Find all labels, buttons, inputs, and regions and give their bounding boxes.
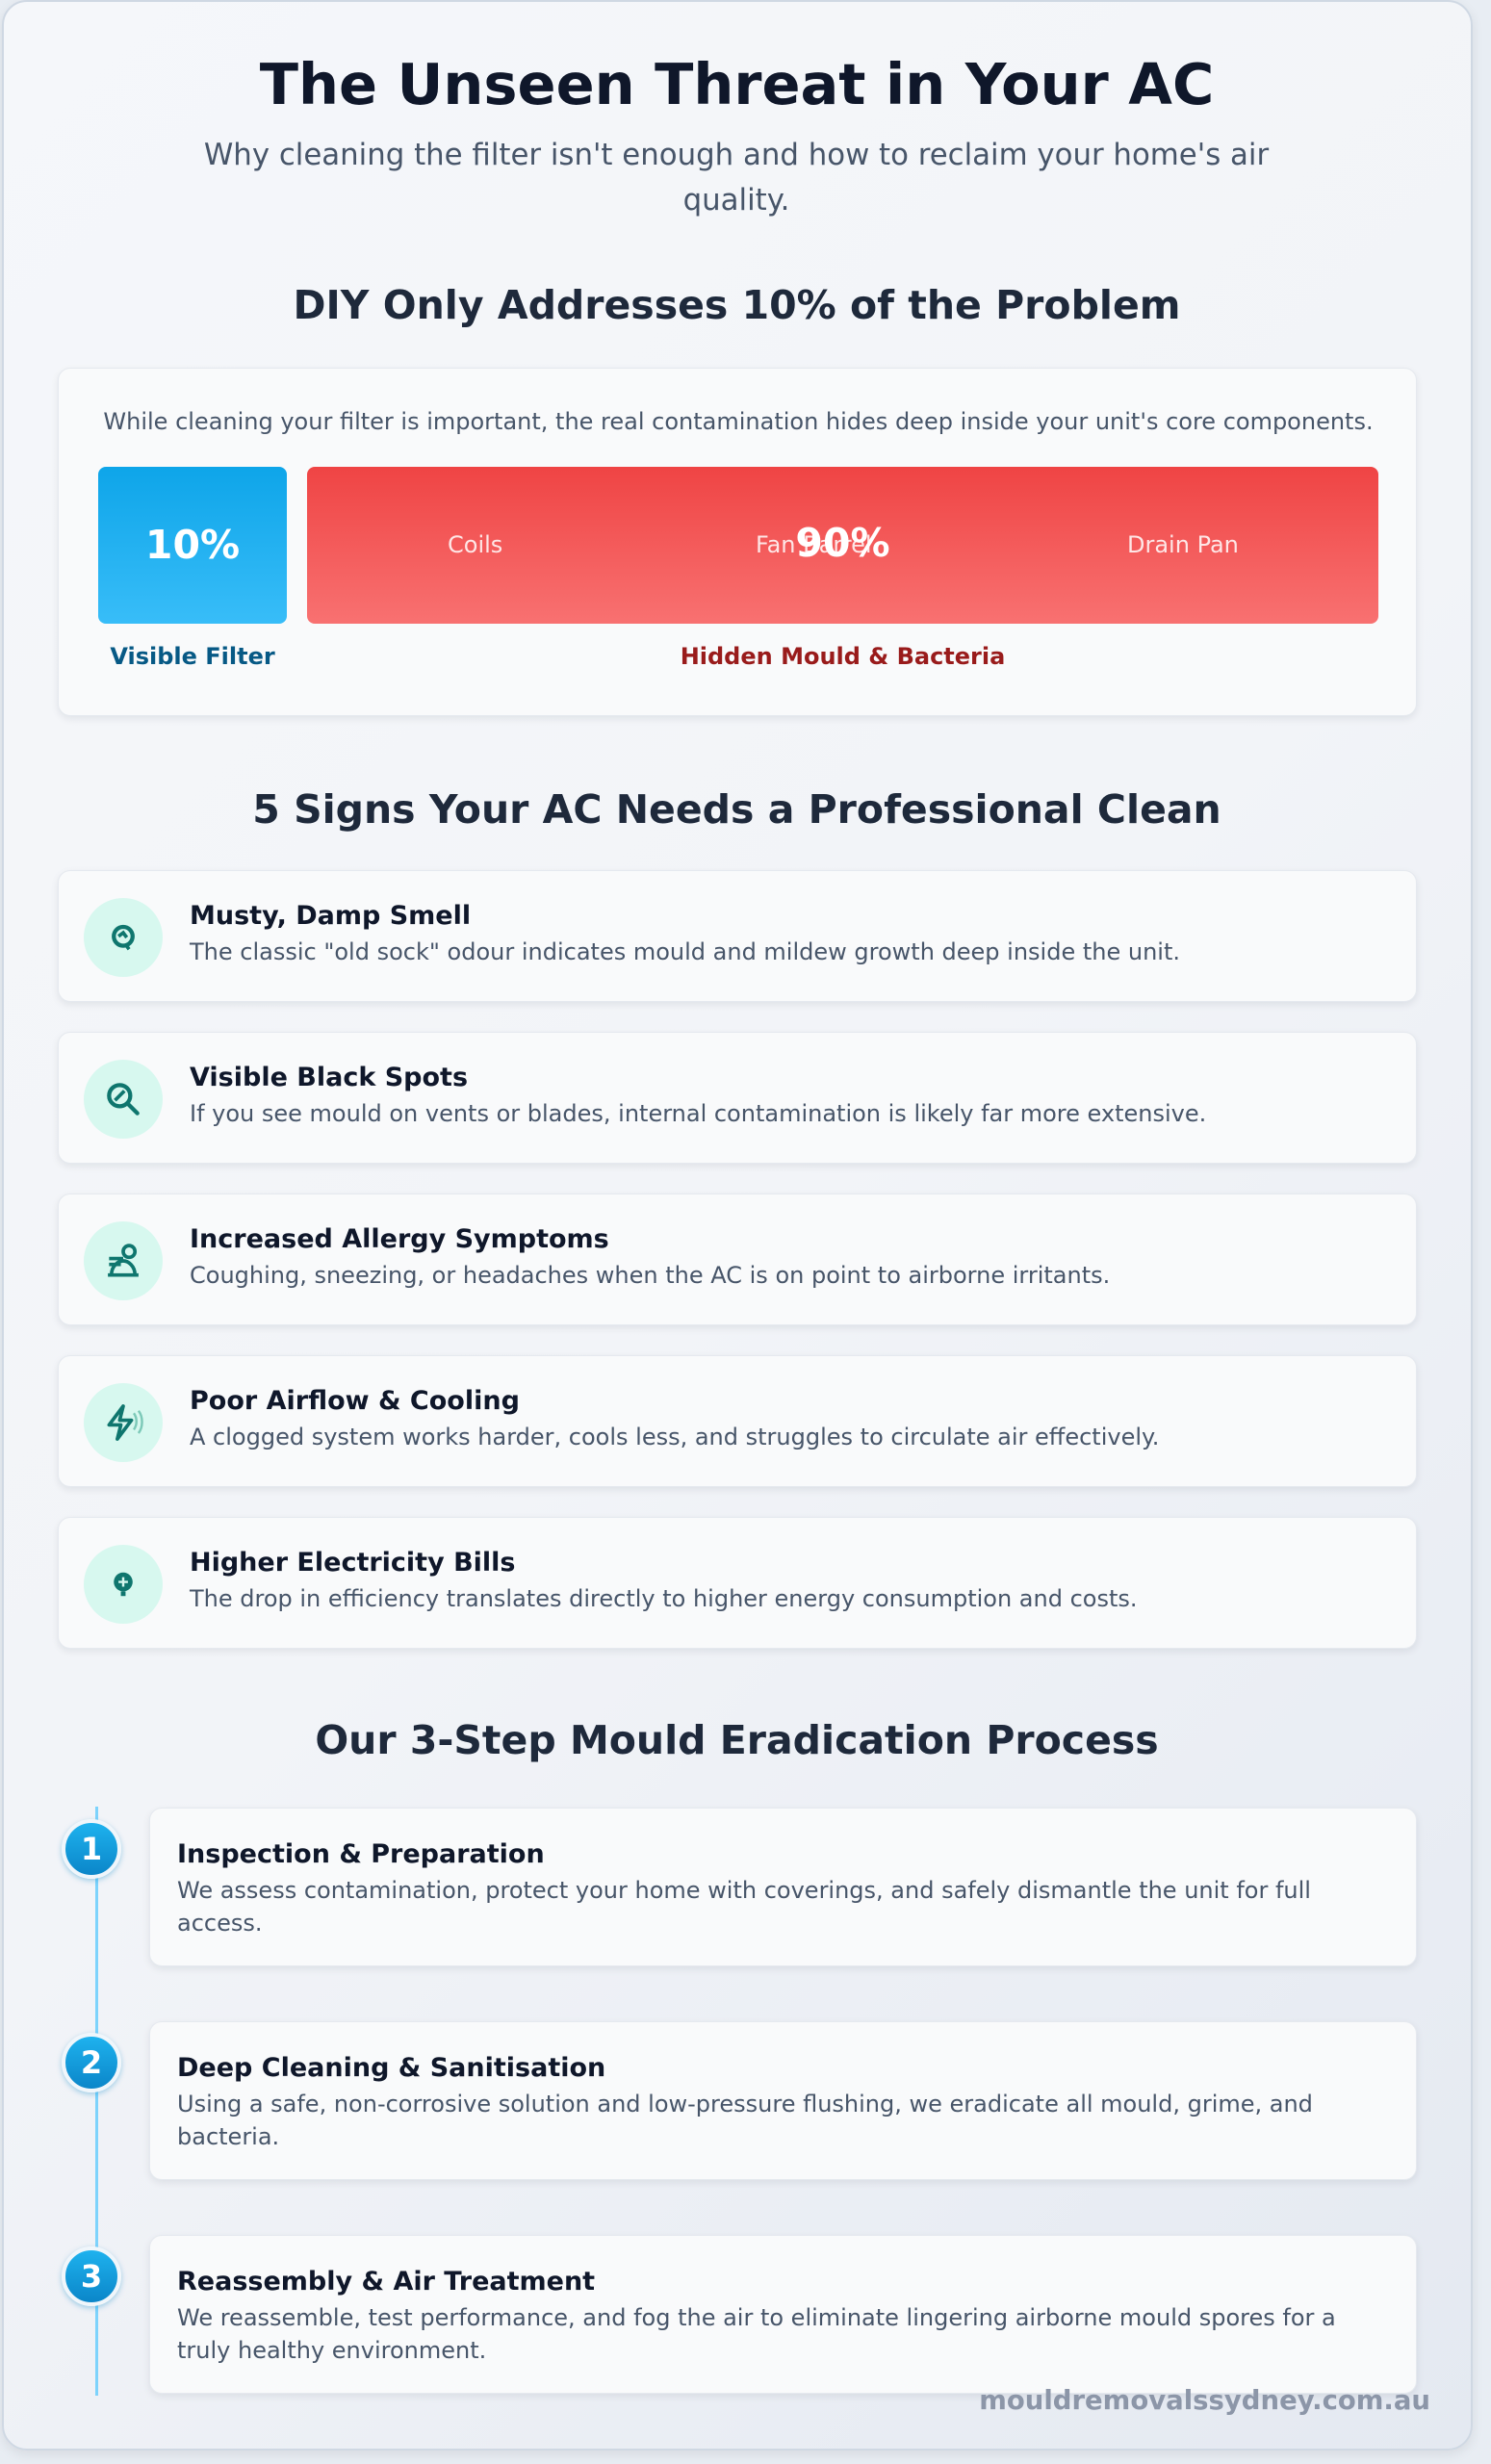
sign 2: If you see mould on vents or blades, internal contamination is likely far more extensive. <box>190 1100 1206 1127</box>
sign 4: A clogged system works harder, cools less, and struggles to circulate air effectively. <box>190 1424 1159 1450</box>
icon: bill <box>84 1545 163 1624</box>
step 2 number: 2 <box>81 2044 102 2081</box>
sign 3: Increased Allergy Symptoms <box>190 1224 609 1254</box>
step 1: We assess contamination, protect your home with coverings, and safely dismantle the unit for full access. <box>177 1877 1311 1937</box>
icon: airflow <box>84 1383 163 1462</box>
title: The Unseen Threat in Your AC <box>260 51 1214 117</box>
panel intro text: While cleaning your filter is important, the real contamination hides deep inside your unit's core components. <box>103 408 1374 435</box>
sign 4: Poor Airflow & Cooling <box>190 1386 520 1416</box>
step 2: Deep Cleaning & Sanitisation <box>177 2053 605 2083</box>
step 1 number: 1 <box>81 1831 102 1867</box>
step 3: We reassemble, test performance, and fog the air to eliminate lingering airborne mould spores for a truly healthy environment. <box>177 2304 1336 2364</box>
step 1 number <box>62 1819 121 1879</box>
bar: 90% hidden: Coils <box>448 531 502 558</box>
sign 3: Coughing, sneezing, or headaches when the AC is on point to airborne irritants. <box>190 1262 1110 1289</box>
heading: DIY: DIY Only Addresses 10% of the Problem <box>293 282 1181 328</box>
bar: 90% hidden: Fan Barrel <box>756 531 872 558</box>
step 3 number: 3 <box>81 2258 102 2295</box>
sign 5: Higher Electricity Bills <box>190 1548 516 1578</box>
sign 2 <box>58 1032 1417 1164</box>
label: visible filter: Visible Filter <box>110 643 275 670</box>
timeline line <box>95 1807 98 2396</box>
bar: 90% hidden <box>307 467 1378 624</box>
heading: process: Our 3-Step Mould Eradication Process <box>315 1717 1159 1763</box>
step 3 <box>149 2235 1417 2394</box>
heading: 5 signs: 5 Signs Your AC Needs a Professional Clean <box>252 786 1221 833</box>
label: hidden mould: Hidden Mould & Bacteria <box>681 643 1005 670</box>
bar: 90% hidden: Drain Pan <box>1127 531 1239 558</box>
sign 1: The classic "old sock" odour indicates mould and mildew growth deep inside the unit. <box>190 938 1180 965</box>
footer url: mouldremovalssydney.com.au <box>979 2385 1430 2416</box>
step 2 number <box>62 2033 121 2092</box>
icon: magnifier <box>84 1060 163 1139</box>
sign 5 <box>58 1517 1417 1649</box>
sign 1: Musty, Damp Smell <box>190 901 471 931</box>
sign 1 <box>58 870 1417 1002</box>
panel: filter vs hidden <box>58 368 1417 716</box>
step 3 number <box>62 2246 121 2306</box>
sign 3 <box>58 1194 1417 1325</box>
sign 4 <box>58 1355 1417 1487</box>
icon: smell <box>84 898 163 977</box>
subtitle: Why cleaning the filter isn't enough and how to reclaim your home's air quality. <box>204 138 1269 218</box>
icon: allergy <box>84 1221 163 1300</box>
step 2 <box>149 2021 1417 2180</box>
bar: 10% visible filter <box>98 467 287 624</box>
step 2: Using a safe, non-corrosive solution and low-pressure flushing, we eradicate all mould, grime, and bacteria. <box>177 2091 1313 2150</box>
sign 5: The drop in efficiency translates directly to higher energy consumption and costs. <box>190 1585 1138 1612</box>
step 1: Inspection & Preparation <box>177 1839 545 1869</box>
bar: 90% hidden: 90% <box>795 520 890 566</box>
step 1 <box>149 1808 1417 1966</box>
step 3: Reassembly & Air Treatment <box>177 2267 595 2297</box>
bar: 10% visible filter: 10% <box>145 522 240 568</box>
sign 2: Visible Black Spots <box>190 1063 468 1092</box>
